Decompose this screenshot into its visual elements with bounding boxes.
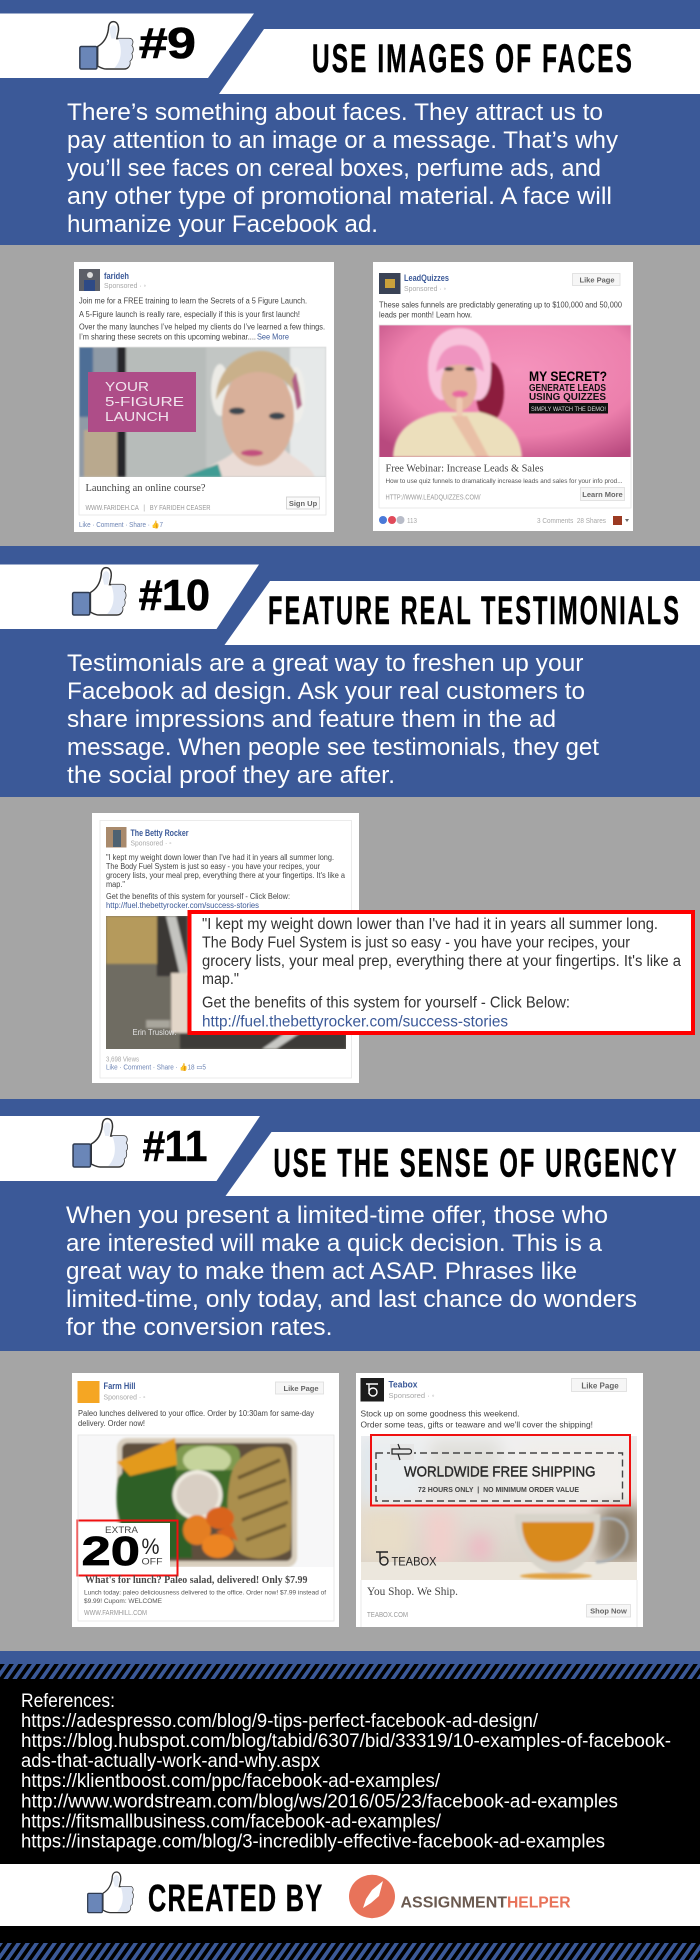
text: tip 9 body: you’ll see faces on cereal boxes, perfume ads, and (67, 155, 601, 182)
logo: teabox wordmark (376, 1552, 436, 1568)
engagement row: betty rocker: Like · Comment · Share · 👍18 ▭5 (106, 1062, 206, 1072)
number: 11: #11 (142, 1122, 208, 1171)
button: like page (572, 1378, 626, 1392)
callout: testimonial quote: "I kept my weight down lower than I've had it in years all summer long. (202, 916, 658, 933)
text: tip 10 body (67, 650, 599, 789)
ad copy: leadquizzes (379, 300, 623, 320)
advertiser name: farideh: farideh (104, 271, 129, 281)
text: tip 10 body: the social proof they are after. (67, 762, 395, 789)
ad copy: farideh: I’m sharing these secrets on this upcoming webinar.... (79, 332, 256, 342)
text: tip 11 body: limited-time, only today, and last chance do wonders (66, 1286, 637, 1313)
link box: teabox: You Shop. We Ship. (367, 1584, 458, 1598)
number: 10: #10 (138, 571, 210, 620)
link box: farideh: WWW.FARIDEH.CA | BY FARIDEH CEASER (86, 505, 210, 512)
link box: farideh: Sign Up (289, 499, 318, 508)
engagement row: leadquizzes (379, 516, 629, 525)
text: tip 10 body: Testimonials are a great way to freshen up your (67, 650, 584, 677)
ad copy: betty rocker: map." (106, 880, 125, 889)
button: like page: Like Page (579, 276, 615, 284)
ad copy: farideh (79, 296, 325, 342)
photo: woman with launch banner (79, 347, 326, 477)
badge: extra 20 percent off: OFF (142, 1556, 163, 1566)
ad copy: farm hill: delivery. Order now! (78, 1419, 145, 1428)
advertiser name: leadquizzes: LeadQuizzes (404, 273, 449, 283)
ad card: farm hill (72, 1373, 339, 1627)
link box: farm hill (78, 1435, 334, 1621)
badge: extra 20 percent off: % (142, 1534, 160, 1559)
banner: your 5-figure launch (88, 372, 196, 432)
ribbon: tip 11 number (0, 1116, 260, 1181)
banner text: my secret (529, 368, 608, 414)
ad copy: teabox (360, 1408, 593, 1430)
video still: gym (106, 916, 346, 1049)
section: tip 10 header and intro (0, 546, 700, 797)
badge: extra 20 percent off: 20 (82, 1528, 140, 1574)
avatar: betty rocker (106, 827, 126, 848)
text: references list: ads-that-actually-work-and-why.aspx (21, 1751, 320, 1772)
ad copy: teabox: Stock up on some goodness this weekend. (360, 1408, 520, 1418)
ad copy: leadquizzes: These sales funnels are predictably generating up to $100,000 and 50,000 (379, 300, 623, 310)
badge: extra 20 percent off (78, 1520, 178, 1576)
footer: references block (0, 1651, 700, 1864)
text: tip 9 body: any other type of promotional material. A face will (67, 183, 612, 210)
text: tip 10 body: Facebook ad design. Ask your real customers to (67, 678, 585, 705)
link box: leadquizzes: How to use quiz funnels to dramatically increase leads and sales for your info prod... (386, 478, 623, 485)
link box: farm hill: What's for lunch? Paleo salad, delivered! Only $7.99 (85, 1574, 308, 1586)
text: tip 11 body (66, 1202, 637, 1341)
ribbon: tip 10 heading (224, 581, 700, 645)
engagement row: betty rocker (106, 1054, 206, 1072)
banner: your 5-figure launch: YOUR (105, 379, 149, 394)
text: references list (21, 1691, 671, 1852)
link box: teabox (361, 1580, 637, 1627)
ad copy: betty rocker (106, 853, 345, 910)
callout: testimonial quote: map." (202, 971, 239, 988)
advertiser name: teabox: Teabox (388, 1380, 418, 1390)
advertiser name: the betty rocker: The Betty Rocker (130, 828, 189, 838)
ad copy: betty rocker: "I kept my weight down lower than I've had it in years all summer long. (106, 853, 334, 862)
offer box: worldwide free shipping: 72 HOURS ONLY | NO MINIMUM ORDER VALUE (418, 1487, 579, 1494)
icon: thumbs up footer (88, 1872, 133, 1913)
text: tip 11 body: great way to make them act ASAP. Phrases like (66, 1258, 577, 1285)
ad card: teabox (356, 1373, 643, 1627)
text: tip 10 body: share impressions and feature them in the ad (67, 706, 556, 733)
text: references list: https://klientboost.com/ppc/facebook-ad-examples/ (21, 1771, 441, 1792)
footer: closing stripes (0, 1926, 700, 1960)
engagement row: leadquizzes: 113 (407, 516, 417, 525)
icon: thumbs up 11 (73, 1119, 127, 1167)
engagement row: farideh: Like · Comment · Share · 👍7 (79, 520, 163, 529)
callout: testimonial quote: The Body Fuel System is just so easy - you have your recipes, your (202, 934, 630, 952)
text: references list: https://blog.hubspot.com/blog/tabid/6307/bid/33319/10-examples-of-facebook- (21, 1731, 671, 1752)
ad card: farideh (74, 262, 334, 532)
banner text: my secret: SIMPLY WATCH THE DEMO! (531, 406, 606, 413)
link box: leadquizzes (379, 325, 631, 508)
callout: testimonial quote: http://fuel.thebettyrocker.com/success-stories (202, 1014, 508, 1030)
photo: tea cup (361, 1436, 640, 1580)
text: tip 9 body: pay attention to an image or a message. That’s why (67, 127, 618, 154)
caption: erin truslow: Erin Truslow: (132, 1027, 176, 1037)
text: references list: References: (21, 1691, 115, 1712)
link box: farm hill: WWW.FARMHILL.COM (84, 1610, 147, 1617)
ribbon: tip 9 number (0, 14, 254, 78)
text: references list: http://www.wordstream.com/blog/ws/2016/05/23/facebook-ad-examples (21, 1792, 618, 1812)
button: like page: Like Page (581, 1382, 619, 1390)
text: tip 11 body: When you present a limited-time offer, those who (66, 1202, 608, 1229)
link box: leadquizzes: Free Webinar: Increase Leads & Sales (386, 462, 544, 474)
icon: thumbs up 10 (73, 568, 126, 615)
engagement row: leadquizzes: 3 Comments 28 Shares (537, 516, 606, 525)
photo: salad tray (114, 1436, 300, 1567)
banner: your 5-figure launch: LAUNCH (105, 409, 169, 424)
offer box: worldwide free shipping (371, 1435, 630, 1506)
engagement row: betty rocker: 3,698 Views (106, 1054, 139, 1064)
link box: farideh: Launching an online course? (86, 482, 206, 494)
callout: testimonial quote: grocery lists, your meal prep, everything there at your fingertips. It's like a (202, 953, 681, 970)
text: tip 9 body: humanize your Facebook ad. (67, 211, 378, 238)
ad copy: farideh: A 5-Figure launch is really rare, especially if this is your first launch! (79, 310, 300, 319)
ad copy: farm hill: Paleo lunches delivered to your office. Order by 10:30am for same-day (78, 1409, 314, 1418)
section: tip 9 header and intro (0, 0, 700, 245)
number: 9: #9 (138, 19, 196, 68)
sponsored label: Sponsored · ◦ (404, 284, 446, 293)
link box: teabox: TEABOX.COM (367, 1612, 408, 1619)
banner text: my secret: USING QUIZZES (529, 391, 606, 403)
link box: farm hill: Lunch today: paleo deliciousness delivered to the office. Order now! $7.99 instead of (84, 1590, 326, 1596)
text: tip 10 body: message. When people see testimonials, they get (67, 734, 599, 761)
ad copy: farideh: Join me for a FREE training to learn the Secrets of a 5 Figure Launch. (79, 296, 307, 306)
ad copy: betty rocker: http://fuel.thebettyrocker.com/success-stories (106, 901, 259, 910)
callout: testimonial quote (190, 912, 693, 1033)
sponsored label: Sponsored · ◦ (104, 1392, 146, 1402)
sponsored label: Sponsored · ◦ (130, 838, 172, 848)
text: references list: https://fitsmallbusiness.com/facebook-ad-examples/ (21, 1812, 442, 1832)
callout: testimonial quote: Get the benefits of this system for yourself - Click Below: (202, 994, 570, 1012)
text: references list: https://instapage.com/blog/3-incredibly-effective-facebook-ad-examples (21, 1832, 605, 1852)
badge: extra 20 percent off: EXTRA (105, 1525, 138, 1535)
ad copy: teabox: Order some teas, gifts or teaware and we'll cover the shipping! (360, 1420, 593, 1430)
ribbon: tip 11 heading (226, 1132, 700, 1196)
logo: teabox wordmark: TEABOX (392, 1554, 436, 1568)
ad copy: farm hill (78, 1409, 314, 1428)
link box: farm hill: $9.99! Cupom: WELCOME (84, 1598, 162, 1605)
section: tip 11 header and intro (0, 1099, 700, 1351)
sponsored label: Sponsored · ◦ (388, 1391, 435, 1400)
ad card: leadquizzes (373, 262, 633, 531)
ad copy: betty rocker: Get the benefits of this system for yourself - Click Below: (106, 892, 290, 901)
ad card: the betty rocker (92, 813, 359, 1083)
ad copy: betty rocker: grocery lists, your meal prep, everything there at your fingertips. It's like a (106, 871, 345, 880)
logo: assignment helper (349, 1875, 571, 1918)
button: like page: Like Page (283, 1384, 319, 1393)
ribbon: tip 10 number (0, 564, 259, 629)
text: created by: CREATED BY (148, 1878, 324, 1920)
avatar: farideh (79, 269, 100, 291)
icon: thumbs up 9 (80, 22, 133, 69)
link box: farideh (79, 347, 326, 515)
logo: assignment helper: ASSIGNMENT (400, 1894, 507, 1912)
offer box: worldwide free shipping: WORLDWIDE FREE SHIPPING (404, 1464, 596, 1480)
footer: created by strip (0, 1864, 700, 1926)
avatar: farm hill (78, 1381, 100, 1403)
ad copy: betty rocker: The Body Fuel System is just so easy - you have your recipes, your (106, 862, 320, 871)
banner text: my secret: GENERATE LEADS (529, 382, 606, 394)
banner: your 5-figure launch: 5-FIGURE (105, 394, 184, 409)
photo: pink haired woman (379, 325, 631, 457)
avatar: teabox (360, 1378, 384, 1402)
button: like page (276, 1382, 324, 1394)
link box: leadquizzes: HTTP://WWW.LEADQUIZZES.COM/ (386, 494, 481, 502)
text: references list: https://adespresso.com/blog/9-tips-perfect-facebook-ad-design/ (21, 1711, 539, 1732)
link box: teabox: Shop Now (590, 1606, 627, 1616)
ad copy: farideh: See More (257, 332, 290, 342)
advertiser name: farm hill: Farm Hill (104, 1381, 136, 1391)
link box: leadquizzes: Learn More (582, 490, 623, 499)
ad copy: farideh: Over the many launches I’ve helped my clients do I’ve learned a few things. (79, 322, 325, 332)
text: tip 9 body: There’s something about faces. They attract us to (67, 99, 603, 126)
text: tip 9 body (67, 99, 618, 238)
banner text: my secret: MY SECRET? (529, 368, 607, 384)
button: like page (572, 274, 620, 286)
logo: assignment helper: HELPER (507, 1894, 571, 1912)
ad copy: leadquizzes: leads per month! Learn how. (379, 310, 472, 320)
avatar: leadquizzes (379, 273, 400, 294)
sponsored label: Sponsored · ◦ (104, 281, 146, 290)
ribbon: tip 9 heading (219, 29, 700, 94)
text: tip 11 body: are interested will make a quick decision. This is a (66, 1230, 603, 1257)
text: tip 11 body: for the conversion rates. (66, 1314, 332, 1341)
